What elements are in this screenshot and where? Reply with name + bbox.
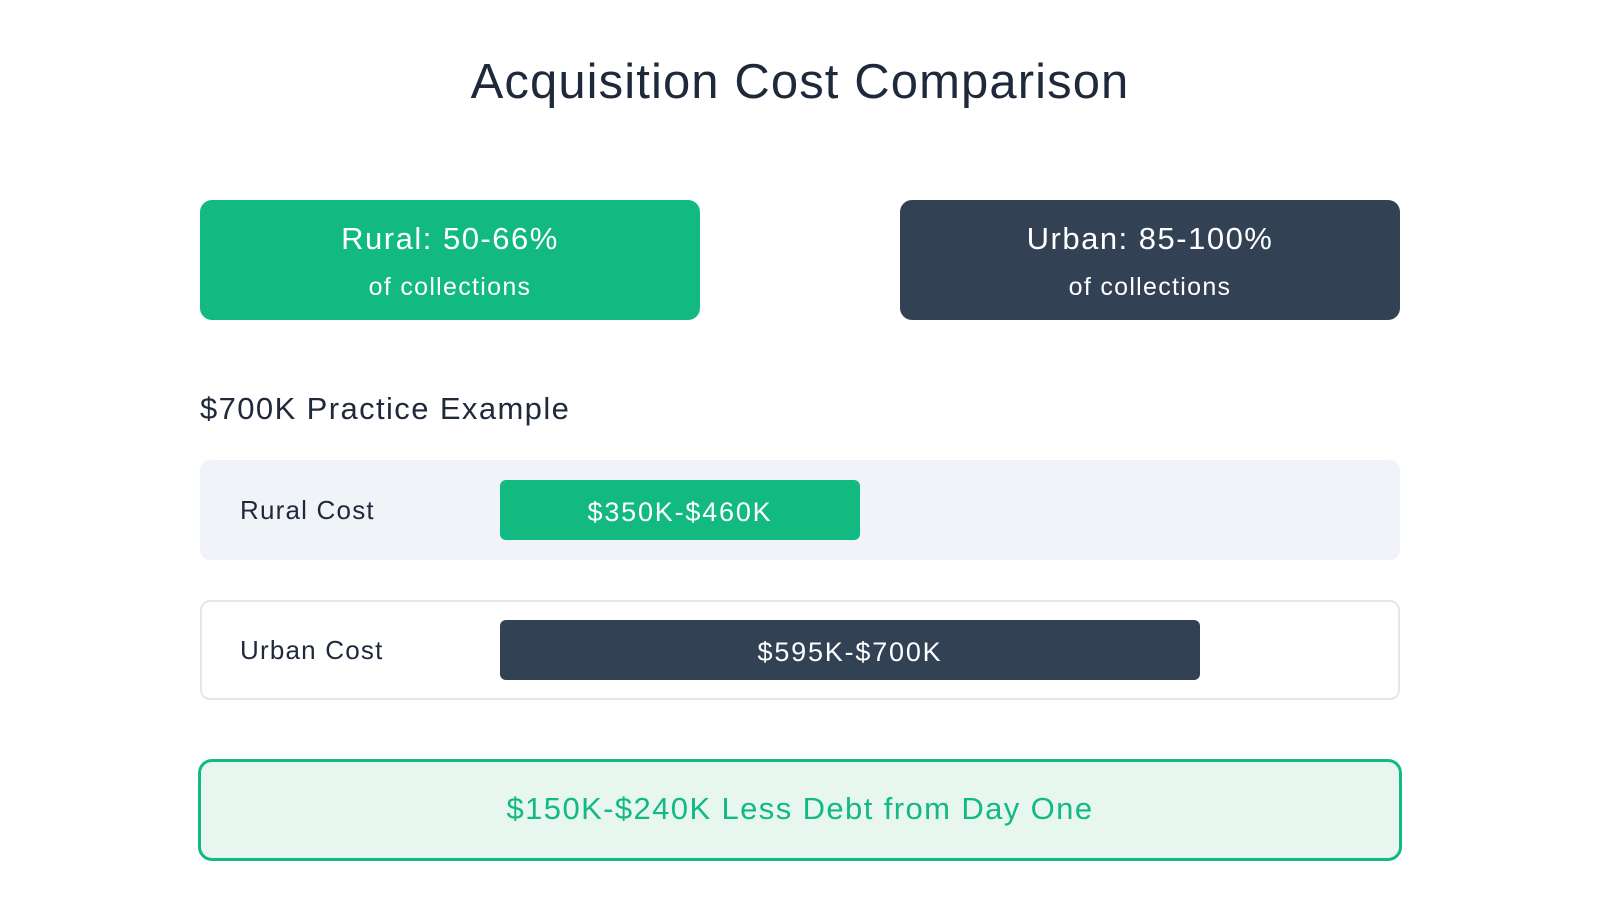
heading: practice example: $700K Practice Example [200, 391, 570, 426]
bar: urban cost: $595K-$700K [758, 637, 942, 667]
panel: rural percentage: of collections [369, 273, 531, 301]
row: rural cost [200, 460, 1400, 560]
label: urban cost: Urban Cost [240, 635, 384, 665]
panel: rural percentage: Rural: 50-66% [341, 221, 559, 256]
panel: urban percentage: Urban: 85-100% [1027, 221, 1273, 256]
callout: savings: $150K-$240K Less Debt from Day One [507, 791, 1093, 826]
bar: rural cost: $350K-$460K [588, 497, 772, 527]
panel: rural percentage [200, 200, 700, 320]
row: urban cost [200, 600, 1400, 700]
callout: savings [198, 759, 1402, 861]
panel: urban percentage: of collections [1069, 273, 1231, 301]
bar: rural cost [500, 480, 860, 540]
label: rural cost: Rural Cost [240, 495, 375, 525]
bar: urban cost [500, 620, 1200, 680]
panel: urban percentage [900, 200, 1400, 320]
title: Acquisition Cost Comparison [471, 55, 1129, 109]
